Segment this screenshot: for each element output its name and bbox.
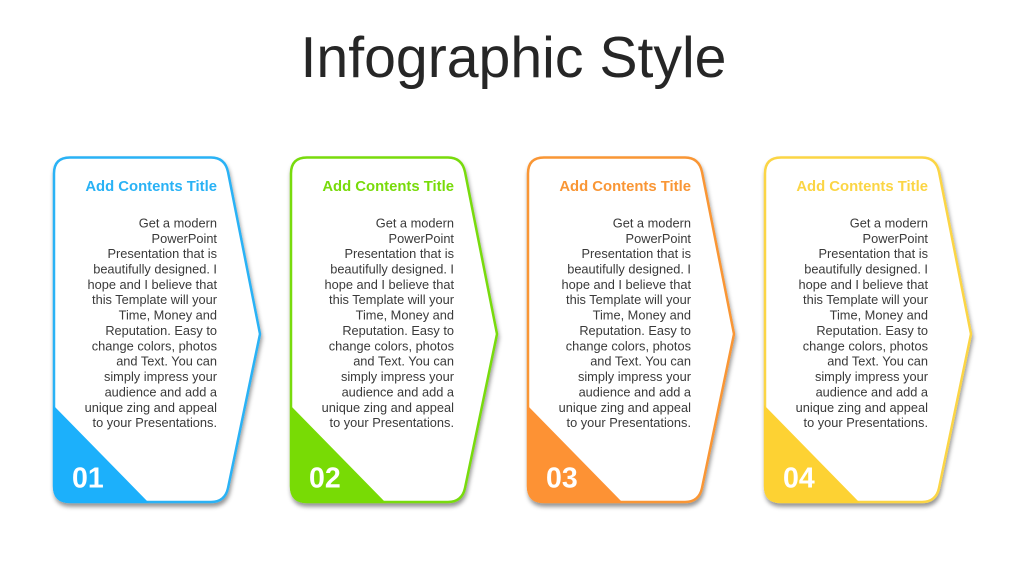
text block 02: to your Presentations. xyxy=(330,415,454,430)
text block 01: to your Presentations. xyxy=(93,415,217,430)
text block 03: Reputation. Easy to xyxy=(579,323,691,338)
text block 02: hope and I believe that xyxy=(324,277,454,292)
text block 01: beautifully designed. I xyxy=(93,262,217,276)
panel: card 02 xyxy=(290,158,497,503)
card outline 01 xyxy=(54,158,260,502)
text block 02: PowerPoint xyxy=(389,231,454,246)
text block 03: audience and add a xyxy=(579,384,692,400)
text block 01: Presentation that is xyxy=(107,246,217,261)
text block 03: this Template will your xyxy=(566,292,692,307)
text block 04 xyxy=(796,216,929,430)
panel: card 03 xyxy=(527,158,734,503)
text block 01: hope and I believe that xyxy=(88,277,217,292)
text block 04: beautifully designed. I xyxy=(804,262,928,276)
text block 03: Get a modern xyxy=(613,216,691,230)
text block 04: unique zing and appeal xyxy=(796,400,928,415)
text block 03: Presentation that is xyxy=(581,246,691,261)
text block 01: audience and add a xyxy=(105,384,218,400)
title: Infographic Style xyxy=(301,26,726,90)
text block 02: Time, Money and xyxy=(356,308,454,322)
text block 01: Reputation. Easy to xyxy=(105,323,217,338)
heading 04: Add Contents Title xyxy=(796,179,928,195)
heading 02: Add Contents Title xyxy=(322,179,454,195)
text block 04: Get a modern xyxy=(850,216,928,230)
text block 02: beautifully designed. I xyxy=(330,262,454,276)
text block 02: simply impress your xyxy=(341,369,455,384)
heading 01: Add Contents Title xyxy=(85,179,217,195)
text block 02: this Template will your xyxy=(329,292,455,307)
text block 01: and Text. You can xyxy=(116,354,217,368)
text block 02: change colors, photos xyxy=(329,338,454,354)
text block 02: audience and add a xyxy=(342,384,455,400)
text block 04: to your Presentations. xyxy=(804,415,928,430)
text block 03: unique zing and appeal xyxy=(559,400,691,415)
text block 04: and Text. You can xyxy=(827,354,928,368)
text block 04: change colors, photos xyxy=(803,338,928,354)
card outline 02 xyxy=(291,158,497,502)
text block 01: this Template will your xyxy=(92,292,218,307)
text block 01: Time, Money and xyxy=(119,308,217,322)
text block 01: unique zing and appeal xyxy=(85,400,217,415)
text block 03: PowerPoint xyxy=(626,231,691,246)
text block 03: simply impress your xyxy=(578,369,692,384)
text block 01 xyxy=(85,216,218,430)
text block 04: Presentation that is xyxy=(818,246,928,261)
text block 01: simply impress your xyxy=(104,369,218,384)
text block 01: Get a modern xyxy=(139,216,217,230)
text block 04: Time, Money and xyxy=(830,308,928,322)
number 01: 01 xyxy=(72,462,104,494)
number 03: 03 xyxy=(546,462,578,494)
text block 04: simply impress your xyxy=(815,369,929,384)
corner triangle 01 xyxy=(53,405,149,503)
corner triangle 02 xyxy=(290,405,386,503)
text block 03: Time, Money and xyxy=(593,308,691,322)
text block 02: and Text. You can xyxy=(353,354,454,368)
text block 01: PowerPoint xyxy=(152,231,217,246)
text block 03 xyxy=(559,216,692,430)
text block 01: change colors, photos xyxy=(92,338,217,354)
text block 02: Get a modern xyxy=(376,216,454,230)
text block 03: change colors, photos xyxy=(566,338,691,354)
text block 02: Reputation. Easy to xyxy=(342,323,454,338)
text block 02 xyxy=(322,216,455,430)
text block 04: PowerPoint xyxy=(863,231,928,246)
text block 04: hope and I believe that xyxy=(798,277,928,292)
text block 04: this Template will your xyxy=(803,292,929,307)
text block 04: audience and add a xyxy=(816,384,929,400)
text block 03: beautifully designed. I xyxy=(567,262,691,276)
corner triangle 03 xyxy=(527,405,623,503)
panel: card 01 xyxy=(53,158,260,503)
text block 02: unique zing and appeal xyxy=(322,400,454,415)
number 04: 04 xyxy=(783,462,815,494)
text block 02: Presentation that is xyxy=(344,246,454,261)
heading 03: Add Contents Title xyxy=(559,179,691,195)
corner triangle 04 xyxy=(764,405,860,503)
number 02: 02 xyxy=(309,462,341,494)
card outline 03 xyxy=(528,158,734,502)
text block 03: and Text. You can xyxy=(590,354,691,368)
text block 04: Reputation. Easy to xyxy=(816,323,928,338)
panel: card 04 xyxy=(764,158,971,503)
card outline 04 xyxy=(765,158,971,502)
text block 03: hope and I believe that xyxy=(562,277,691,292)
text block 03: to your Presentations. xyxy=(567,415,691,430)
